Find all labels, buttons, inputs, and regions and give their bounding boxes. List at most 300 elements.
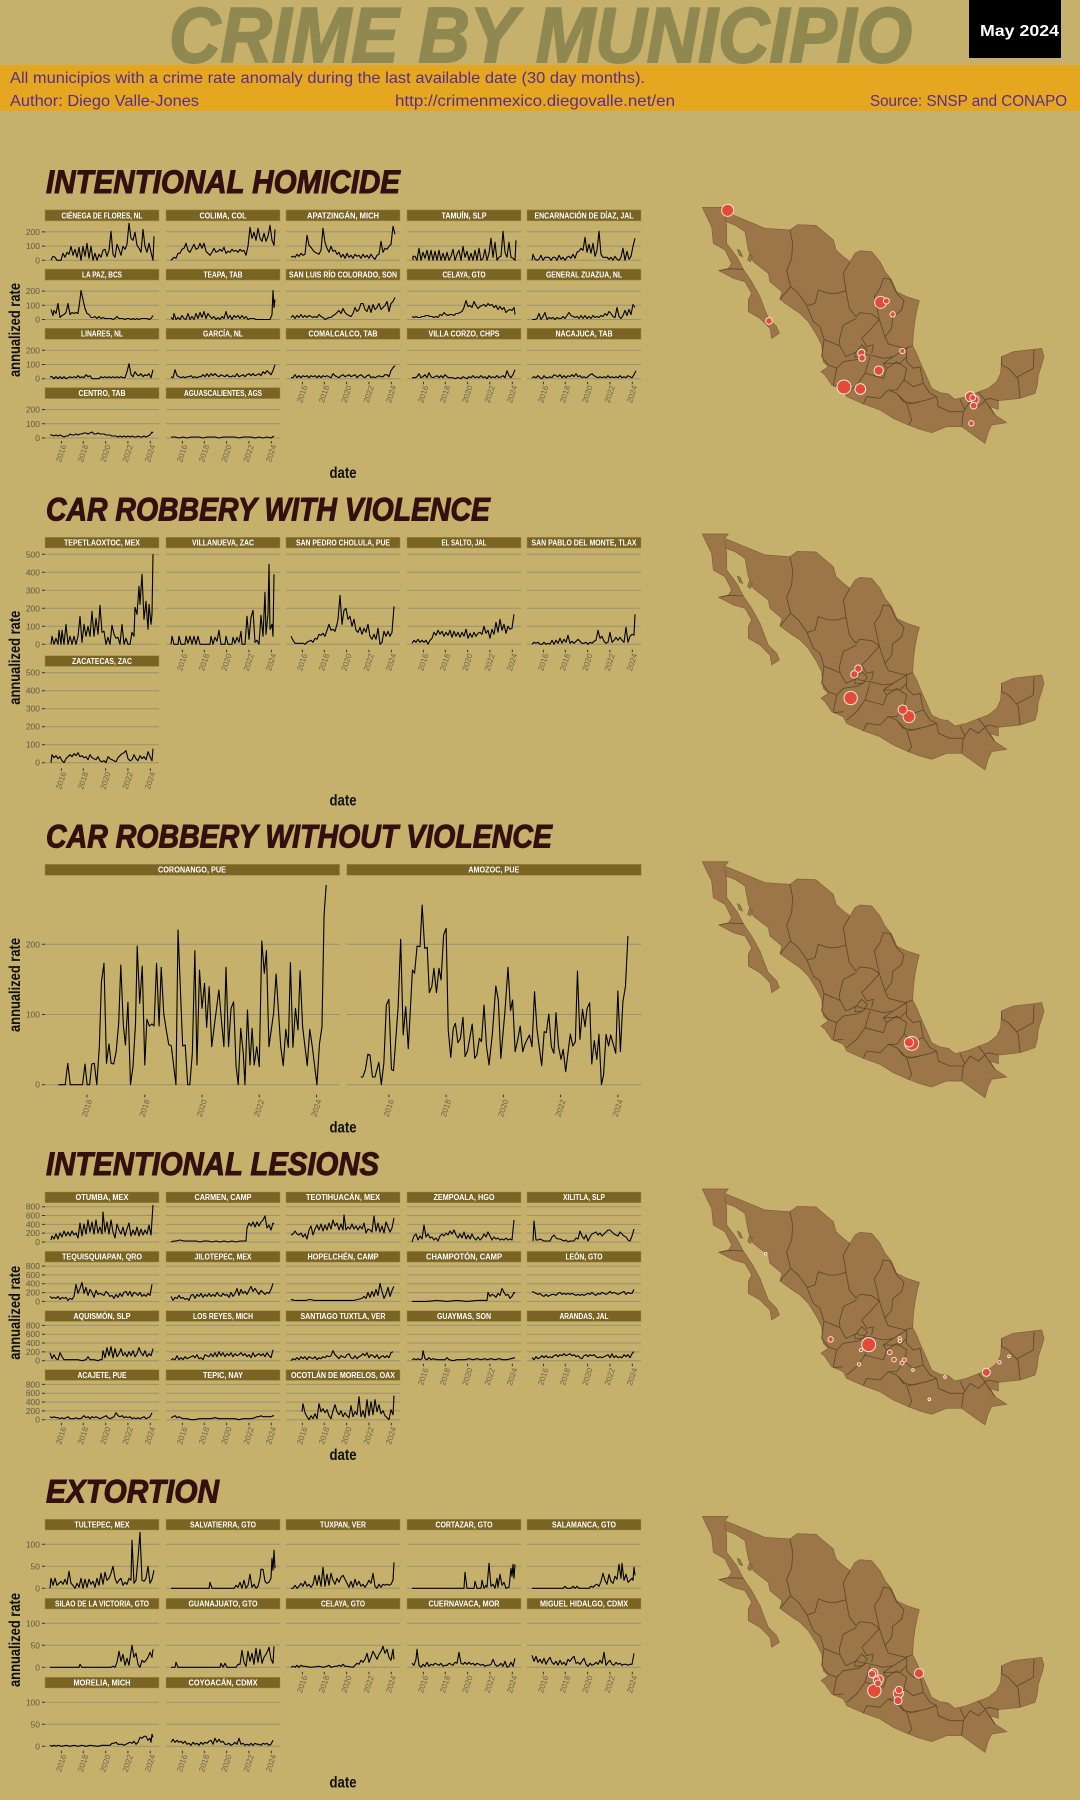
x axis: 2024 <box>625 384 639 404</box>
x axis: 2016 <box>416 652 431 672</box>
x axis: 2020 <box>340 1674 354 1694</box>
panel: Apatzingan: APATZINGÁN, MICH <box>307 211 379 220</box>
x axis: 2022 <box>362 384 376 404</box>
panel: Tequisquiapan: 200 <box>26 1288 40 1298</box>
panel: Tepetlaoxtoc: 500 <box>26 549 40 559</box>
y axis title: annualized rate <box>7 1593 24 1687</box>
panel: Morelia: 100 <box>26 1697 40 1707</box>
panel: Aguascalientes <box>166 388 280 463</box>
heading: INTENTIONAL HOMICIDE <box>46 164 402 200</box>
panel: Zacatecas: 400 <box>26 686 40 696</box>
panel: Tepic: TEPIC, NAY <box>203 1371 244 1380</box>
panel: Morelia: 0 <box>35 1741 40 1751</box>
x axis: 2016 <box>536 1366 551 1387</box>
panel: Ocotlan de Morelos <box>286 1370 400 1446</box>
x axis: 2022 <box>362 652 376 672</box>
x axis title: date <box>330 465 357 482</box>
panel: Cortazar: CORTAZAR, GTO <box>436 1521 492 1530</box>
x axis <box>80 1095 324 1118</box>
map: homicide locations <box>702 204 1044 443</box>
x axis: 2016 <box>175 1753 190 1773</box>
panel: Hopelchen: HOPELCHÉN, CAMP <box>308 1253 379 1262</box>
x axis: 2020 <box>496 1098 511 1118</box>
heading: CAR ROBBERY WITHOUT VIOLENCE <box>46 819 553 855</box>
heading: EXTORTION <box>46 1473 220 1509</box>
x axis <box>175 441 278 463</box>
heading: CAR ROBBERY WITH VIOLENCE <box>46 491 491 527</box>
x axis: 2020 <box>220 1753 234 1773</box>
panel: San Luis Rio Colorado <box>286 269 400 320</box>
x axis: 2020 <box>99 770 113 791</box>
x axis: 2020 <box>581 1674 595 1694</box>
x axis: 2018 <box>317 1425 331 1446</box>
x axis <box>536 650 639 672</box>
x axis: 2016 <box>54 770 69 791</box>
panel: Tuxpan: TUXPAN, VER <box>320 1521 366 1530</box>
panel: San Luis Rio Colorado: SAN LUIS RÍO COLORADO, SON <box>289 270 397 280</box>
map: extortion locations <box>702 1516 1044 1752</box>
x axis: 2024 <box>384 384 398 404</box>
panel: Comalcalco <box>286 328 400 404</box>
panel: Cienega de Flores: 100 <box>26 241 40 251</box>
x axis <box>295 650 398 672</box>
x axis <box>416 1364 519 1387</box>
section: intentional lesions <box>7 1146 1044 1464</box>
x axis: 2016 <box>54 1753 69 1773</box>
panel: Aguascalientes: AGUASCALIENTES, AGS <box>184 389 263 398</box>
panel: Centro <box>26 388 159 463</box>
panel: Zacatecas: 100 <box>26 740 40 750</box>
panel: Tepetlaoxtoc: TEPETLAOXTOC, MEX <box>64 538 141 547</box>
panel: Tultepec: 50 <box>31 1561 40 1571</box>
map: non-violent car robbery locations <box>702 862 1044 1098</box>
panel: Salamanca <box>527 1519 641 1588</box>
panel: Coyoacan: COYOACÁN, CDMX <box>188 1679 258 1688</box>
x axis: 2016 <box>80 1098 94 1118</box>
panel: El Salto: EL SALTO, JAL <box>442 538 487 547</box>
panel: Zacatecas: 300 <box>26 704 40 714</box>
panel: Aquismon: 600 <box>26 1329 40 1339</box>
panel: Salvatierra: SALVATIERRA, GTO <box>190 1521 256 1530</box>
x axis: 2016 <box>416 384 431 404</box>
y axis title: annualized rate <box>7 611 24 705</box>
x axis: 2018 <box>438 652 452 672</box>
x axis: 2024 <box>384 1425 398 1446</box>
panel: Nacajuca <box>527 328 641 404</box>
x axis: 2022 <box>121 443 135 463</box>
x axis: 2020 <box>99 1425 113 1446</box>
x axis: 2022 <box>603 1674 617 1694</box>
panel: Silao de la Victoria: 0 <box>35 1662 40 1672</box>
panel: Villa Corzo: VILLA CORZO, CHPS <box>428 330 500 339</box>
panel: Centro: 200 <box>26 405 40 415</box>
panel: Xilitla <box>527 1192 641 1242</box>
panel: Coronango <box>26 864 340 1118</box>
x axis: 2016 <box>536 652 551 672</box>
panel: Tultepec: TULTEPEC, MEX <box>74 1521 130 1530</box>
panel: Tequisquiapan: 400 <box>26 1279 40 1289</box>
panel: Tequisquiapan: 0 <box>35 1296 40 1306</box>
x axis: 2022 <box>554 1098 568 1118</box>
panel: Cienega de Flores: CIÉNEGA DE FLORES, NL <box>62 211 143 220</box>
panel: Linares: LINARES, NL <box>81 330 123 339</box>
x axis: 2018 <box>197 1425 211 1446</box>
panel: Villa Corzo <box>407 328 521 404</box>
x axis: 2024 <box>264 652 278 672</box>
x axis: 2024 <box>625 652 639 672</box>
x axis: 2022 <box>242 443 256 463</box>
panel: Arandas: ARANDAS, JAL <box>560 1312 609 1321</box>
panel: Acajete: ACAJETE, PUE <box>78 1371 127 1380</box>
panel: Zacatecas: 500 <box>26 668 40 678</box>
panel: Zempoala <box>407 1192 521 1242</box>
panel: Guaymas: GUAYMAS, SON <box>437 1312 491 1321</box>
panel: Cuernavaca: CUERNAVACA, MOR <box>428 1600 500 1609</box>
panel: Acajete: 200 <box>26 1406 40 1416</box>
x axis: 2022 <box>121 770 135 791</box>
x axis: 2018 <box>76 770 90 791</box>
panel: Tamuin <box>407 210 521 260</box>
panel: Acajete: 600 <box>26 1388 40 1398</box>
x axis: 2022 <box>483 652 497 672</box>
panel: Garcia <box>166 328 280 379</box>
panel: Teotihuacan: TEOTIHUACÁN, MEX <box>306 1193 381 1202</box>
panel: General Zuazua: GENERAL ZUAZUA, NL <box>546 270 622 280</box>
panel: Zacatecas <box>26 656 159 791</box>
panel: Champoton <box>407 1251 521 1301</box>
x axis: 2024 <box>264 1425 278 1446</box>
panel: Morelia: 50 <box>31 1719 40 1729</box>
x axis: 2024 <box>143 1753 157 1773</box>
panel: Coronango: 200 <box>26 939 40 949</box>
panel: Acajete <box>26 1370 159 1446</box>
panel: Nacajuca: NACAJUCA, TAB <box>556 330 613 339</box>
x axis <box>382 1095 625 1118</box>
panel: Tepetlaoxtoc: 100 <box>26 621 40 631</box>
panel: Coyoacan <box>166 1677 280 1773</box>
x axis: 2022 <box>121 1753 135 1773</box>
x axis: 2016 <box>175 652 190 672</box>
panel: Tultepec: 100 <box>26 1539 40 1549</box>
panel: Tepic <box>166 1370 280 1446</box>
panel: Centro: 0 <box>35 433 40 443</box>
panel: Colima <box>166 210 280 260</box>
panel: Tequisquiapan: 600 <box>26 1270 40 1280</box>
panel: Encarnacion de Diaz: ENCARNACIÓN DE DÍAZ, JAL <box>534 211 634 220</box>
map: violent car robbery locations <box>702 534 1044 770</box>
date badge: May 2024 <box>980 23 1059 40</box>
panel: Aquismon: 0 <box>35 1356 40 1366</box>
panel: Otumba: 200 <box>26 1228 40 1238</box>
heading: INTENTIONAL LESIONS <box>46 1146 380 1182</box>
panel: Otumba: 800 <box>26 1202 40 1212</box>
x axis: 2016 <box>382 1098 396 1118</box>
x axis: 2016 <box>416 1674 431 1694</box>
panel: Santiago Tuxtla <box>286 1311 400 1361</box>
x axis: 2024 <box>505 652 519 672</box>
panel: Cortazar <box>407 1519 521 1588</box>
panel: Carmen: CARMEN, CAMP <box>194 1193 252 1202</box>
panel: Acajete: 400 <box>26 1397 40 1407</box>
x axis <box>175 1751 278 1773</box>
x axis title: date <box>330 1447 357 1464</box>
panel: Xilitla: XILITLA, SLP <box>563 1193 606 1202</box>
x axis: 2018 <box>558 1366 572 1387</box>
x axis: 2018 <box>558 652 572 672</box>
x axis: 2024 <box>309 1098 324 1118</box>
panel: Otumba: 600 <box>26 1210 40 1220</box>
x axis: 2016 <box>54 1425 69 1446</box>
panel: Silao de la Victoria <box>26 1598 159 1672</box>
x axis: 2022 <box>362 1674 376 1694</box>
x axis: 2020 <box>581 1366 595 1387</box>
x axis: 2024 <box>264 443 278 463</box>
subtitle band: All municipios with a crime rate anomaly during the last available date (30 day months). <box>10 70 645 87</box>
panel: Cienega de Flores: 0 <box>35 255 40 265</box>
x axis: 2022 <box>483 1366 497 1387</box>
y axis title: annualized rate <box>7 938 24 1032</box>
x axis: 2016 <box>54 443 69 463</box>
x axis: 2018 <box>438 384 452 404</box>
panel: Tultepec <box>26 1519 159 1593</box>
x axis: 2020 <box>195 1098 209 1118</box>
panel: Teapa <box>166 269 280 320</box>
panel: Linares <box>26 328 159 384</box>
x axis: 2016 <box>175 1425 190 1446</box>
panel: La Paz: LA PAZ, BCS <box>82 270 123 280</box>
x axis: 2020 <box>220 652 234 672</box>
panel: Garcia: GARCÍA, NL <box>203 330 243 339</box>
panel: Aquismon: 400 <box>26 1338 40 1348</box>
panel: Otumba: 0 <box>35 1237 40 1247</box>
panel: Salvatierra <box>166 1519 280 1588</box>
x axis: 2018 <box>317 1674 331 1694</box>
x axis <box>536 382 639 404</box>
x axis: 2022 <box>603 384 617 404</box>
x axis <box>295 382 398 404</box>
x axis: 2018 <box>76 1425 90 1446</box>
x axis: 2024 <box>625 1366 639 1387</box>
panel: Centro: CENTRO, TAB <box>78 389 126 398</box>
y axis title: annualized rate <box>7 283 24 377</box>
panel: Apatzingan <box>286 210 400 260</box>
x axis: 2024 <box>143 443 157 463</box>
panel: Morelia <box>26 1677 159 1773</box>
x axis: 2018 <box>76 443 90 463</box>
x axis: 2024 <box>143 770 157 791</box>
x axis: 2016 <box>536 384 551 404</box>
panel: Cienega de Flores <box>26 210 159 265</box>
panel: Coronango: 0 <box>35 1080 40 1090</box>
panel: Tultepec: 0 <box>35 1583 40 1593</box>
x axis: 2022 <box>603 1366 617 1387</box>
panel: Guaymas <box>407 1311 521 1387</box>
panel: Zacatecas: 0 <box>35 758 40 768</box>
panel: Otumba <box>26 1192 159 1247</box>
panel: Tequisquiapan: 800 <box>26 1261 40 1271</box>
x axis: 2020 <box>461 1366 475 1387</box>
x axis <box>295 1672 398 1694</box>
panel: San Pedro Cholula: SAN PEDRO CHOLULA, PUE <box>296 538 391 547</box>
panel: Silao de la Victoria: 50 <box>31 1640 40 1650</box>
panel: Jilotepec <box>166 1251 280 1301</box>
panel: Linares: 0 <box>35 374 40 384</box>
x axis <box>416 382 519 404</box>
panel: Teapa: TEAPA, TAB <box>204 270 243 280</box>
x axis: 2022 <box>603 652 617 672</box>
subtitle band <box>0 65 1080 111</box>
section: car robbery without violence <box>7 819 1044 1136</box>
section: extortion <box>7 1473 1044 1792</box>
panel: La Paz: 0 <box>35 314 40 324</box>
x axis: 2018 <box>138 1098 152 1118</box>
panel: Miguel Hidalgo <box>527 1598 641 1694</box>
x axis: 2024 <box>505 1674 519 1694</box>
x axis: 2018 <box>76 1753 90 1773</box>
panel: Villanueva <box>166 537 280 672</box>
panel: Tepetlaoxtoc: 300 <box>26 585 40 595</box>
x axis: 2018 <box>317 384 331 404</box>
panel: Tuxpan <box>286 1519 400 1588</box>
date badge <box>969 0 1061 58</box>
x axis title: date <box>330 1119 357 1136</box>
panel: Miguel Hidalgo: MIGUEL HIDALGO, CDMX <box>540 1600 629 1609</box>
panel: Champoton: CHAMPOTÓN, CAMP <box>426 1253 503 1262</box>
x axis: 2016 <box>295 1674 310 1694</box>
x axis: 2020 <box>461 384 475 404</box>
x axis: 2016 <box>416 1366 431 1387</box>
panel: Celaya: CELAYA, GTO <box>321 1600 365 1609</box>
panel: Ocotlan de Morelos: OCOTLÁN DE MORELOS, OAX <box>291 1371 396 1380</box>
x axis: 2020 <box>340 1425 354 1446</box>
x axis <box>536 1672 639 1694</box>
x axis: 2020 <box>340 652 354 672</box>
x axis: 2018 <box>558 384 572 404</box>
panel: Colima: COLIMA, COL <box>200 211 247 220</box>
panel: Jilotepec: JILOTEPEC, MEX <box>194 1253 252 1262</box>
x axis: 2020 <box>581 384 595 404</box>
x axis: 2024 <box>143 1425 157 1446</box>
x axis: 2018 <box>558 1674 572 1694</box>
panel: Aquismon: 800 <box>26 1320 40 1330</box>
x axis: 2016 <box>536 1674 551 1694</box>
panel: Teotihuacan <box>286 1192 400 1242</box>
x axis: 2016 <box>295 384 310 404</box>
x axis <box>175 1423 278 1446</box>
subtitle band: Source: SNSP and CONAPO <box>870 93 1067 110</box>
x axis: 2024 <box>384 652 398 672</box>
panel: Celaya <box>407 269 521 320</box>
panel: Tepetlaoxtoc <box>26 537 159 649</box>
x axis: 2022 <box>483 384 497 404</box>
panel: Leon: LEÓN, GTO <box>566 1253 602 1262</box>
panel: Guanajuato <box>166 1598 280 1667</box>
x axis: 2022 <box>242 1753 256 1773</box>
x axis <box>295 1423 398 1446</box>
x axis: 2022 <box>483 1674 497 1694</box>
panel: Acajete: 0 <box>35 1415 40 1425</box>
panel: Tepetlaoxtoc: 200 <box>26 603 40 613</box>
panel: Linares: 100 <box>26 360 40 370</box>
x axis <box>416 650 519 672</box>
x axis <box>54 1751 157 1773</box>
panel: Morelia: MORELIA, MICH <box>74 1679 131 1688</box>
x axis title: date <box>330 793 357 810</box>
panel: Salamanca: SALAMANCA, GTO <box>552 1521 616 1530</box>
x axis <box>175 650 278 672</box>
x axis: 2020 <box>581 652 595 672</box>
panel: Leon <box>527 1251 641 1301</box>
x axis: 2018 <box>439 1098 453 1118</box>
x axis: 2020 <box>461 1674 475 1694</box>
panel: Zacatecas: ZACATECAS, ZAC <box>72 657 132 666</box>
panel: Arandas <box>527 1311 641 1387</box>
panel: Zacatecas: 200 <box>26 722 40 732</box>
x axis: 2024 <box>505 1366 519 1387</box>
x axis: 2016 <box>175 443 190 463</box>
panel: Tepetlaoxtoc: 0 <box>35 639 40 649</box>
x axis: 2016 <box>295 652 310 672</box>
panel: San Pablo del Monte <box>527 537 641 672</box>
panel: Tequisquiapan <box>26 1251 159 1306</box>
x axis title: date <box>330 1775 357 1792</box>
panel: Tequisquiapan: TEQUISQUIAPAN, QRO <box>62 1253 142 1262</box>
x axis: 2022 <box>242 652 256 672</box>
panel: Amozoc <box>347 864 641 1118</box>
x axis: 2020 <box>220 1425 234 1446</box>
x axis: 2020 <box>461 652 475 672</box>
panel: Otumba: OTUMBA, MEX <box>76 1193 129 1202</box>
panel: Otumba: 400 <box>26 1219 40 1229</box>
x axis: 2024 <box>505 384 519 404</box>
x axis: 2024 <box>625 1674 639 1694</box>
panel: Comalcalco: COMALCALCO, TAB <box>308 330 378 339</box>
panel: Celaya <box>286 1598 400 1694</box>
x axis: 2020 <box>340 384 354 404</box>
panel: El Salto <box>407 537 521 672</box>
panel: Cuernavaca <box>407 1598 521 1694</box>
x axis: 2018 <box>317 652 331 672</box>
x axis: 2022 <box>252 1098 266 1118</box>
panel: Cienega de Flores: 200 <box>26 227 40 237</box>
panel: Centro: 100 <box>26 419 40 429</box>
x axis: 2022 <box>362 1425 376 1446</box>
panel: Aquismon <box>26 1311 159 1366</box>
x axis: 2024 <box>264 1753 278 1773</box>
panel: Santiago Tuxtla: SANTIAGO TUXTLA, VER <box>300 1312 386 1321</box>
x axis <box>54 441 157 463</box>
x axis: 2020 <box>99 443 113 463</box>
panel: Silao de la Victoria: SILAO DE LA VICTORIA, GTO <box>55 1600 149 1609</box>
panel: San Pedro Cholula <box>286 537 400 672</box>
panel: Encarnacion de Diaz <box>527 210 641 260</box>
panel: Zempoala: ZEMPOALA, HGO <box>434 1193 494 1202</box>
x axis: 2024 <box>611 1098 625 1118</box>
x axis: 2018 <box>197 1753 211 1773</box>
panel: Celaya: CELAYA, GTO <box>442 270 486 280</box>
x axis: 2024 <box>384 1674 398 1694</box>
panel: Tepetlaoxtoc: 400 <box>26 567 40 577</box>
map: lesions locations <box>702 1189 1044 1425</box>
panel: Tamuin: TAMUÍN, SLP <box>442 211 487 220</box>
x axis <box>536 1364 639 1387</box>
panel: Aquismon: AQUISMÓN, SLP <box>74 1312 131 1321</box>
panel: La Paz: 200 <box>26 286 40 296</box>
panel: Coronango: 100 <box>26 1009 40 1019</box>
x axis: 2018 <box>197 443 211 463</box>
panel: Acajete: 800 <box>26 1379 40 1389</box>
x axis: 2022 <box>121 1425 135 1446</box>
